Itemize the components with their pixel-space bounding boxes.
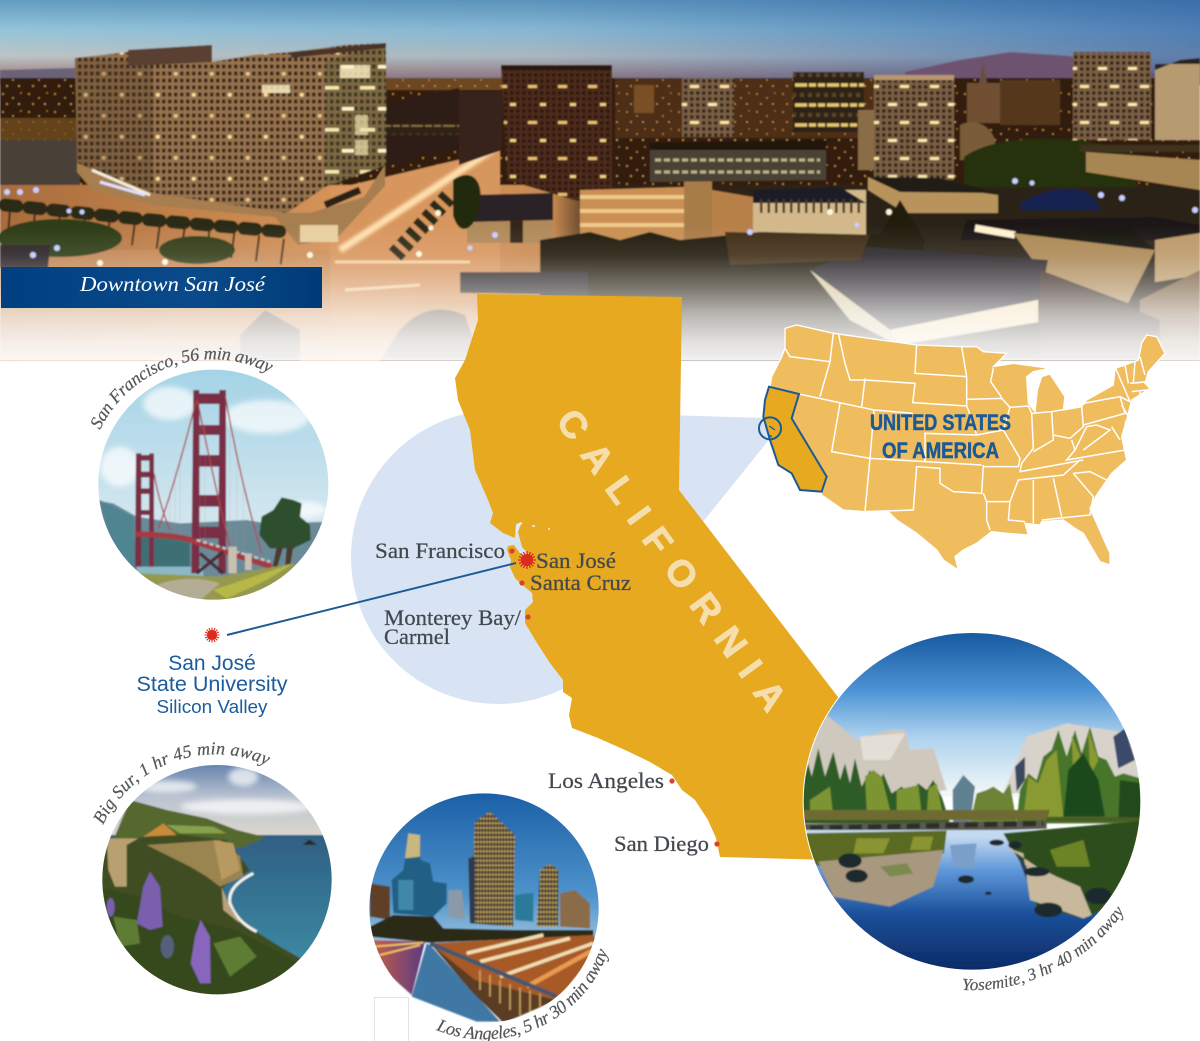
legend: San José State University: San José — [168, 652, 256, 675]
caption: San Francisco travel time — [100, 359, 302, 430]
palms and trees — [5, 205, 285, 232]
dark tower — [386, 88, 459, 167]
main center tower — [501, 65, 612, 205]
low brown building — [467, 205, 553, 243]
faint empty box — [374, 998, 408, 1041]
city markers — [509, 548, 720, 847]
city labels: Los Angeles — [548, 768, 664, 793]
city labels: Monterey Bay/ — [384, 605, 522, 630]
city labels: Santa Cruz — [530, 570, 631, 595]
caption: Big Sur travel time — [103, 754, 305, 825]
photo circle: Golden Gate Bridge — [93, 365, 333, 607]
caption: Yosemite travel time — [962, 885, 1140, 990]
legend: San José State University: Silicon Valley — [156, 696, 268, 717]
caption: Downtown San José: Downtown San José — [79, 272, 267, 296]
USA map — [759, 325, 1165, 570]
foreground dark building & trees — [540, 200, 925, 340]
lights — [97, 209, 892, 266]
legend: San José State University: State University — [136, 673, 288, 696]
text: Big Sur, 1 hr 45 min away — [93, 742, 270, 825]
header photo: downtown San José at dusk — [0, 0, 1200, 360]
zoom wedge from USA map to Bay Area — [497, 410, 772, 625]
city labels: San José — [536, 548, 616, 573]
text: San Francisco, 56 min away — [91, 348, 273, 430]
city labels: San Diego — [614, 831, 709, 856]
California state — [455, 294, 860, 860]
caption: Downtown San José — [1, 267, 322, 308]
city labels — [375, 538, 709, 856]
city labels: San Francisco — [375, 538, 505, 563]
text: Los Angeles, 5 hr 30 min away — [436, 948, 610, 1041]
caption: Los Angeles travel time — [436, 938, 612, 1039]
zoom circle behind coast — [351, 410, 645, 704]
text: Yosemite, 3 hr 40 min away — [963, 906, 1124, 990]
parking & low buildings — [580, 187, 684, 240]
California lettering: CALIFORNIA — [549, 402, 794, 719]
right towers — [682, 78, 734, 137]
map label: United States of America — [870, 410, 1011, 463]
photo circle: Yosemite — [797, 627, 1150, 977]
legend: San José State University — [136, 628, 288, 717]
big hotel complex — [75, 43, 386, 213]
white bay inlets — [516, 523, 550, 532]
locator circle — [759, 417, 781, 439]
California highlighted on USA map — [763, 387, 827, 492]
map label: United States of America: OF AMERICA — [882, 438, 999, 463]
fade to white — [0, 225, 1200, 360]
photo circle: Big Sur — [97, 760, 337, 1000]
photo circle: Los Angeles — [365, 790, 605, 1023]
icon: San José starburst — [518, 551, 536, 569]
city labels: Carmel — [384, 624, 450, 649]
map label: United States of America: UNITED STATES — [870, 410, 1011, 435]
line from legend to San José — [227, 563, 516, 635]
icon: legend starburst — [204, 628, 220, 642]
